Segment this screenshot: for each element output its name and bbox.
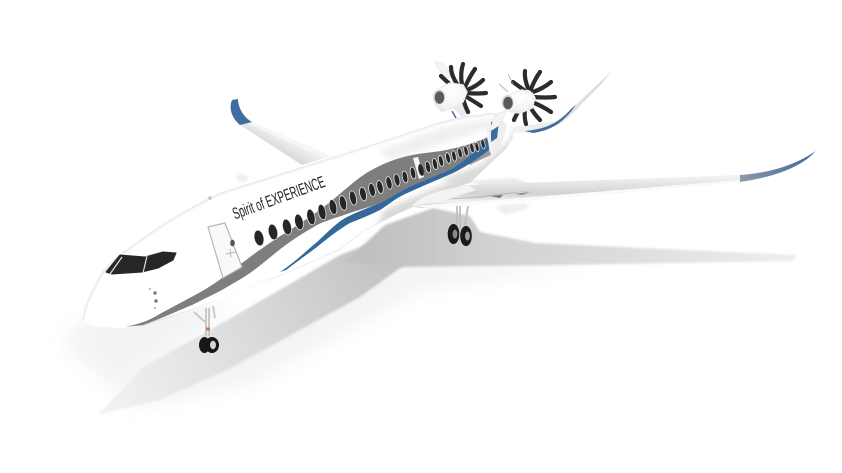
cabin door [208,223,242,278]
grey stripe [125,137,488,327]
propeller blades [441,64,486,112]
ground shadow [60,174,797,415]
rear grey patch [468,149,491,165]
fuselage [82,110,520,330]
engine 2 with propeller [499,71,555,124]
far wing [231,99,332,165]
winglet [231,99,252,125]
livery text: Spirit of EXPERIENCE [230,173,328,223]
nose landing gear [194,306,219,353]
nose sensors [149,288,158,309]
pale blade [435,62,450,78]
wing root fairing [412,185,476,206]
tailplane [508,71,612,133]
cabin windows [253,139,486,247]
propeller blades [513,71,555,124]
rear door [413,157,425,179]
wingtip [740,151,816,182]
main landing gear [448,206,472,246]
illustration: aircraft concept [74,62,816,414]
rear fin root [488,116,507,152]
blue stripe [280,138,491,272]
cockpit windows [106,252,176,274]
engine 1 with propeller [433,62,486,118]
near wing [412,151,816,208]
pylon [450,100,472,118]
fuselage shading [82,113,520,330]
